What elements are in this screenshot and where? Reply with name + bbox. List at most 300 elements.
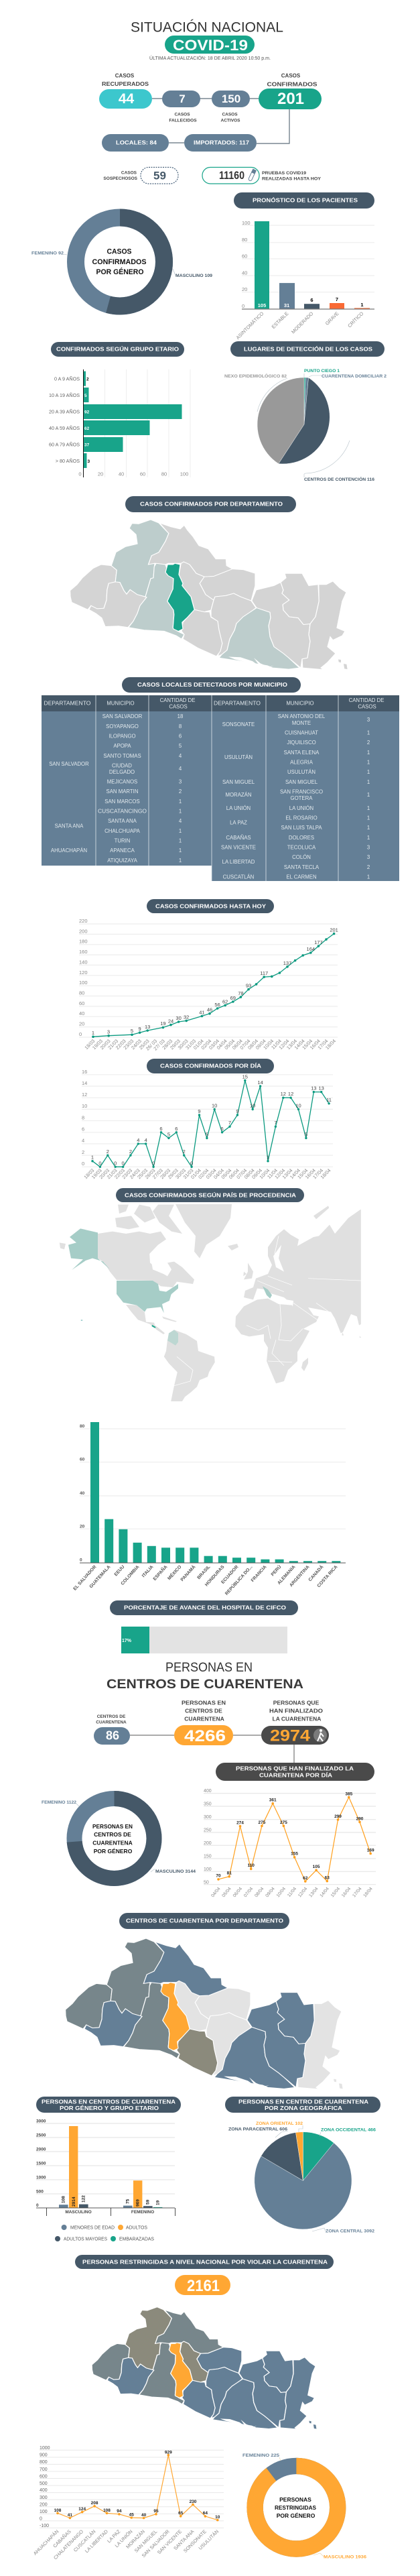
line chart: restricted by department: 500: [40, 2481, 48, 2486]
counter: active: CASOS: [222, 113, 238, 117]
line chart: confirmed per day: 03/04: [205, 1167, 218, 1180]
progress bar: hospital 17%: 17%: [122, 1639, 132, 1643]
bar chart: prognosis: 40: [242, 270, 247, 276]
gray land masses: [60, 1204, 361, 1401]
counter: people in centres: PERSONAS EN: [182, 1700, 226, 1706]
bar chart: age groups: 40 A 59 AÑOS: [49, 425, 80, 431]
bar chart: age groups: 37: [84, 443, 90, 448]
line chart: restricted by department: 108: [103, 2508, 111, 2513]
line chart: cumulative confirmed cases: 69: [230, 995, 236, 1001]
line chart: cumulative confirmed cases: 28/03: [161, 1038, 173, 1051]
line chart: finished quarantine per day: [204, 1789, 376, 1898]
table body: right half: GOTERA: [291, 795, 313, 801]
line chart: confirmed per day: 06/04: [228, 1167, 240, 1180]
bar chart: age groups: 80: [161, 471, 167, 477]
counter: local: LOCALES: 84: [116, 139, 157, 146]
title: ÚLTIMA ACTUALIZACIÓN: 18 DE ABRIL 2020 10:50 p.m.: [149, 55, 271, 61]
line chart: finished quarantine per day: 15/04: [330, 1887, 341, 1898]
line chart: finished quarantine per day: 361: [269, 1798, 277, 1802]
line chart: confirmed per day: 29/03: [167, 1167, 180, 1180]
pie chart: geographic zone: ZONA CENTRAL 3092: [326, 2229, 374, 2234]
line chart: finished quarantine per day: 11/04: [287, 1887, 297, 1898]
bar chart: gender and age group: FEMENINO: [131, 2210, 154, 2215]
line chart: cumulative confirmed cases: 29/03: [169, 1038, 182, 1051]
progress bar: hospital 17%: [121, 1627, 287, 1653]
heading: geographic zone: [225, 2097, 380, 2113]
table body: right half: LA UNIÓN: [226, 805, 251, 811]
bar chart: gender and age group: 500: [36, 2190, 44, 2194]
bar chart: age groups: 20 A 39 AÑOS: [49, 409, 80, 414]
bar chart: prognosis: 31: [284, 302, 289, 308]
counter: active: [212, 91, 250, 123]
line chart: finished quarantine per day: 18/04: [362, 1887, 374, 1898]
line chart: cumulative confirmed cases: 05/04: [223, 1038, 236, 1051]
table body: right half: 1: [367, 874, 370, 880]
heading: geographic zone: POR ZONA GEOGRÁFICA: [265, 2105, 342, 2111]
line chart: confirmed per day: 12: [281, 1091, 286, 1097]
bar chart: prognosis: 60: [242, 253, 247, 259]
line chart: cumulative confirmed cases: 56: [214, 1002, 220, 1008]
bar chart: cases by country: 60: [80, 1458, 85, 1462]
line chart: confirmed per day: 17/04: [311, 1167, 324, 1180]
pie chart: detection places: PUNTO CIEGO 1: [304, 369, 340, 373]
table body: right half: 1: [367, 750, 370, 756]
heading: municipalities: CASOS LOCALES DETECTADOS POR MUNICIPIO: [137, 681, 287, 688]
line chart: confirmed per day: 1: [267, 1155, 269, 1161]
bar chart: prognosis: [234, 220, 374, 341]
table body: left half: SAN SALVADOR: [49, 761, 89, 767]
table header: [44, 697, 384, 709]
map: confirmed cases by department: [70, 520, 348, 670]
line chart: cumulative confirmed cases: 27/ 03: [152, 1038, 166, 1052]
line chart: confirmed per day: 6: [159, 1126, 163, 1132]
line chart: cumulative confirmed cases: 40: [79, 1010, 84, 1016]
table body: left half: 1: [179, 828, 182, 834]
bar chart: prognosis: CRÍTICO: [346, 310, 365, 329]
bar chart: age groups: 60 A 79 AÑOS: [49, 441, 80, 448]
line chart: restricted by department: 124: [78, 2507, 86, 2512]
table body: left half: 5: [179, 743, 182, 749]
counter: tests: [202, 168, 322, 184]
bar chart: cases by country: COLOMBIA: [121, 1565, 141, 1586]
table body: left half: 1: [179, 809, 182, 814]
bar chart: gender and age group: 3000: [36, 2119, 46, 2124]
bar chart: gender and age group: 75: [126, 2199, 130, 2204]
bar chart: gender and age group: 122: [82, 2195, 86, 2203]
counter: people in centres: [174, 1700, 233, 1745]
heading: country of origin: [116, 1188, 304, 1202]
line chart: confirmed per day: 5: [305, 1131, 307, 1137]
line chart: confirmed per day: 5: [206, 1131, 208, 1137]
counter: active: ACTIVOS: [221, 118, 240, 123]
line chart: confirmed per day: 0: [98, 1160, 101, 1166]
bar chart: age groups: 40: [119, 471, 124, 477]
line chart: cumulative confirmed cases: 23/03: [122, 1038, 135, 1051]
line chart: cumulative confirmed cases: 18/04: [324, 1038, 337, 1051]
line chart: cumulative confirmed cases: 60: [79, 1000, 84, 1006]
line chart: cumulative confirmed cases: 117: [260, 970, 268, 976]
line chart: confirmed per day: 01/04: [190, 1167, 202, 1180]
donut: people in centres by gender: CUARENTENA: [92, 1840, 133, 1847]
table body: left half: 4: [179, 753, 182, 759]
counter: imported: IMPORTADOS: 117: [194, 139, 249, 146]
counter: people in centres: 4266: [184, 1727, 226, 1745]
line chart: finished quarantine per day: 299: [334, 1814, 342, 1819]
bar chart: cases by country: BRASIL: [196, 1565, 211, 1580]
bar chart: gender and age group: 969: [135, 2199, 141, 2207]
line chart: confirmed per day: 4: [137, 1137, 139, 1143]
line chart: restricted by department: 45: [129, 2513, 134, 2517]
line chart: cumulative confirmed cases: 177: [314, 939, 323, 945]
bar chart: age groups: 60: [140, 471, 145, 477]
line chart: finished quarantine per day: 200: [204, 1841, 212, 1846]
line chart: confirmed per day: 9: [198, 1108, 201, 1114]
line chart: confirmed per day: [82, 1069, 333, 1180]
line chart: cumulative confirmed cases: 30/03: [177, 1038, 190, 1051]
bar chart: gender and age group: 1500: [36, 2162, 46, 2166]
pie chart: detection places: CUARENTENA DOMICILIAR 2: [322, 374, 387, 379]
table body: left half: 6: [179, 734, 182, 739]
table body: left half: SOYAPANGO: [106, 723, 139, 729]
bar chart: cases by country: 80: [80, 1424, 85, 1429]
bar chart: cases by country: COSTA RICA: [316, 1565, 339, 1588]
donut: people in centres by gender: MASCULINO 3144: [155, 1869, 196, 1874]
pie chart: geographic zone: [228, 2121, 376, 2234]
table body: right half: COLÓN: [292, 854, 311, 860]
donut: restricted by gender: PERSONAS: [279, 2496, 311, 2503]
bar chart: prognosis: 80: [242, 237, 247, 243]
table body: right half: 1: [367, 779, 370, 785]
line chart: confirmed per day: 31/03: [182, 1167, 195, 1180]
line chart: confirmed per day: 4: [82, 1137, 84, 1144]
bar chart: cases by country: ESPAÑA: [151, 1564, 169, 1582]
table body: right half: JIQUILISCO: [287, 740, 316, 746]
line chart: confirmed per day: 28/03: [159, 1167, 171, 1180]
donut: restricted by gender: [242, 2453, 366, 2560]
donut: confirmed by gender: MASCULINO 109: [176, 274, 212, 278]
bar chart: age groups: 5: [84, 394, 87, 398]
heading: gender and age: POR GÉNERO Y GRUPO ETARIO: [60, 2105, 159, 2111]
line chart: confirmed per day: 19/03: [90, 1167, 103, 1180]
counter: deaths: FALLECIDOS: [169, 118, 197, 123]
table body: left half: CUSCATANCINGO: [98, 809, 147, 814]
line chart: confirmed per day: 10: [250, 1102, 255, 1108]
line chart: restricted by department: 0: [40, 2517, 42, 2521]
line chart: confirmed per day: 04/04: [212, 1167, 225, 1180]
line chart: confirmed per day: 18/03: [82, 1167, 95, 1180]
bar chart: prognosis: ESTABLE: [271, 310, 290, 330]
bar chart: gender and age group: 1000: [36, 2175, 46, 2180]
pie chart: detection places: NEXO EPIDEMIOLÓGICO 82: [224, 373, 287, 379]
donut: people in centres by gender: PERSONAS EN: [92, 1823, 133, 1830]
line chart: finished quarantine per day: 05/04: [221, 1887, 232, 1898]
title: [131, 20, 283, 61]
line chart: restricted by department: CUSCATLÁN: [72, 2528, 97, 2553]
line chart: confirmed per day: 6: [221, 1126, 224, 1132]
table body: left half: DELGADO: [109, 769, 135, 775]
heading: confirmed to date: [147, 899, 274, 913]
bar chart: gender and age group: 19: [155, 2200, 161, 2205]
heading: restricted people: [75, 2255, 334, 2269]
line chart: cumulative confirmed cases: 02/04: [200, 1038, 212, 1051]
panel: case counters: [99, 72, 322, 184]
bar chart: gender and age group: MASCULINO: [65, 2210, 92, 2215]
table body: right half: 1: [367, 815, 370, 821]
table header: CASOS: [358, 703, 376, 709]
table body: right half: SAN LUIS TALPA: [281, 825, 322, 831]
line chart: cumulative confirmed cases: 13: [145, 1024, 150, 1030]
donut: restricted by gender: POR GÉNERO: [277, 2512, 316, 2519]
line chart: cumulative confirmed cases: 24/03: [130, 1038, 143, 1051]
line chart: confirmed per day: 18/04: [319, 1167, 332, 1180]
panel: quarantine counters: [94, 1700, 329, 1763]
table body: left half: SANTA ANA: [108, 818, 137, 824]
bar chart: cases by country: ALEMANIA: [277, 1565, 297, 1586]
map: world, country of origin: [60, 1204, 361, 1401]
line chart: restricted by department: SONSONATE: [182, 2528, 208, 2554]
counter: recovered: [99, 72, 152, 109]
pie chart: geographic zone: ZONA OCCIDENTAL 466: [321, 2128, 376, 2132]
table body: right half: 1: [367, 825, 370, 831]
line chart: restricted by department: LA UNIÓN: [114, 2528, 134, 2549]
line chart: cumulative confirmed cases: 04/04: [216, 1038, 228, 1051]
line chart: cumulative confirmed cases: 19/03: [91, 1038, 104, 1051]
line chart: restricted by department: 230: [190, 2500, 197, 2504]
donut: restricted by gender: FEMENINO 225: [242, 2453, 279, 2458]
line chart: restricted by department: 300: [40, 2496, 48, 2500]
heading: confirmed per day: CASOS CONFIRMADOS POR DÍA: [160, 1062, 261, 1069]
line chart: confirmed per day: 21/03: [106, 1167, 119, 1180]
heading: hospital progress: PORCENTAJE DE AVANCE DEL HOSPITAL DE CIFCO: [124, 1604, 286, 1611]
line chart: cumulative confirmed cases: 26/ 03: [145, 1038, 158, 1052]
table body: right half: 1: [367, 759, 370, 766]
line chart: confirmed per day: 2: [183, 1149, 186, 1155]
line chart: restricted by department: USULUTÁN: [197, 2528, 220, 2551]
legend: EMBARAZADAS: [119, 2237, 154, 2242]
legend: MENORES DE EDAD: [70, 2226, 115, 2230]
table body: left half: CHALCHUAPA: [104, 828, 141, 834]
line chart: finished quarantine per day: 155: [291, 1852, 298, 1856]
heading: centres by department: CENTROS DE CUARENTENA POR DEPARTAMENTO: [126, 1918, 283, 1924]
line chart: confirmed per day: 22/03: [113, 1167, 126, 1180]
line chart: finished quarantine per day: 13/04: [308, 1887, 320, 1898]
counter: active: 150: [222, 93, 240, 105]
table body: left half: SAN SALVADOR: [102, 713, 143, 719]
counter: people finished: 2974: [270, 1727, 311, 1745]
heading: centres by department: [119, 1913, 289, 1929]
legend: ADULTOS MAYORES: [64, 2237, 107, 2242]
counter: people finished: PERSONAS QUE: [273, 1700, 320, 1706]
bar chart: age groups: [49, 369, 190, 477]
line chart: finished quarantine per day: 07/04: [243, 1887, 254, 1898]
line chart: cumulative confirmed cases: 10/04: [262, 1038, 275, 1051]
bar chart: cases by country: MÉXICO: [166, 1564, 182, 1581]
line chart: confirmed per day: 13: [311, 1086, 316, 1092]
line chart: restricted by department: 95: [153, 2509, 159, 2514]
table body: right half: 2: [367, 864, 370, 870]
line chart: cumulative confirmed cases: 09/04: [255, 1038, 267, 1051]
line chart: restricted by department: 65: [178, 2511, 184, 2516]
bar chart: prognosis: 100: [242, 220, 251, 226]
bar chart: age groups: 2: [86, 377, 89, 382]
table body: right half: [221, 713, 370, 880]
heading: country of origin: CASOS CONFIRMADOS SEGÚN PAÍS DE PROCEDENCIA: [125, 1191, 296, 1199]
line chart: restricted by department: LA LIBERTAD: [84, 2528, 109, 2554]
line chart: restricted by department: 94: [117, 2509, 122, 2514]
line chart: restricted by department: MORAZÁN: [125, 2528, 146, 2550]
table header: CASOS: [169, 703, 188, 709]
line chart: confirmed per day: 15/04: [296, 1167, 309, 1180]
counter: recovered: 44: [119, 91, 134, 107]
line chart: restricted by department: 400: [40, 2488, 48, 2493]
line chart: finished quarantine per day: 10/04: [276, 1887, 287, 1898]
table header: CANTIDAD DE: [160, 697, 195, 703]
line chart: cumulative confirmed cases: 19: [160, 1020, 166, 1027]
table body: right half: 1: [367, 835, 370, 841]
line chart: confirmed per day: 2: [107, 1149, 109, 1155]
line chart: finished quarantine per day: 275: [258, 1820, 266, 1825]
line chart: restricted by department: 929: [165, 2450, 172, 2455]
line chart: cumulative confirmed cases: 100: [79, 980, 88, 986]
bar chart: age groups: 100: [180, 471, 188, 477]
donut: confirmed by gender: [31, 217, 212, 306]
icon: test tube: [248, 169, 257, 182]
bar chart: cases by country: ARGENTINA: [289, 1565, 311, 1588]
line chart: finished quarantine per day: 06/04: [232, 1887, 243, 1898]
line chart: cumulative confirmed cases: 14/04: [293, 1038, 306, 1051]
heading: confirmed per day: [147, 1059, 274, 1073]
bar chart: prognosis: ASINTOMÁTICO: [234, 310, 265, 341]
title: quarantine centres: [107, 1661, 303, 1692]
line chart: cumulative confirmed cases: 32: [184, 1014, 189, 1020]
line chart: finished quarantine per day: 169: [367, 1848, 374, 1853]
donut: people in centres by gender: CENTROS DE: [94, 1831, 131, 1838]
heading: age group: CONFIRMADOS SEGÚN GRUPO ETARIO: [56, 345, 179, 353]
bar chart: gender and age group: 59: [146, 2199, 150, 2205]
bar chart: gender and age group: 2914: [72, 2197, 76, 2207]
line chart: cumulative confirmed cases: 06/04: [231, 1038, 244, 1051]
line chart: cumulative confirmed cases: 13/04: [285, 1038, 298, 1051]
bar chart: age groups: 10 A 19 AÑOS: [49, 392, 80, 398]
bar chart: age groups: > 80 AÑOS: [56, 458, 80, 464]
line chart: finished quarantine per day: 400: [204, 1789, 212, 1794]
line chart: cumulative confirmed cases: 137: [283, 960, 291, 966]
table body: right half: EL CARMEN: [286, 874, 317, 880]
line chart: cumulative confirmed cases: 80: [79, 990, 84, 996]
table body: left half: SAN MARTIN: [107, 788, 138, 795]
bar chart: gender and age group: 0: [36, 2203, 39, 2208]
counter: local: [102, 134, 169, 152]
line chart: restricted by department: CABAÑAS: [52, 2528, 72, 2549]
line chart: confirmed per day: 08/04: [243, 1167, 256, 1180]
table body: right half: 1: [367, 769, 370, 775]
line chart: confirmed per day: 23/03: [121, 1167, 133, 1180]
bar chart: cases by country: 20: [80, 1524, 85, 1529]
line chart: cumulative confirmed cases: 12/04: [277, 1038, 290, 1051]
line chart: cumulative confirmed cases: 30: [176, 1015, 182, 1021]
table body: right half: LA UNIÓN: [289, 805, 313, 811]
line chart: cumulative confirmed cases: 46: [207, 1007, 212, 1012]
table body: left half: AHUACHAPÁN: [51, 847, 87, 854]
table body: right half: MONTE: [292, 720, 311, 726]
counter: centres: CENTROS DE: [97, 1714, 126, 1719]
white borders and inland seas: [150, 1245, 284, 1274]
line chart: finished quarantine per day: 350: [204, 1802, 212, 1806]
bar chart: cases by country: PERÚ: [269, 1564, 283, 1577]
line chart: confirmed per day: 27/03: [151, 1167, 164, 1180]
map: quarantine centres by department: [66, 1938, 343, 2089]
donut: restricted by gender: MASCULINO 1936: [324, 2555, 366, 2560]
table body: right half: SAN FRANCISCO: [280, 788, 323, 795]
counter: recovered: RECUPERADOS: [102, 81, 149, 87]
line chart: confirmed per day: 12: [82, 1092, 87, 1098]
counter: restricted total: 2161: [187, 2277, 220, 2295]
table body: left half: 2: [179, 788, 182, 795]
bar chart: prognosis: 7: [336, 296, 338, 302]
line chart: cumulative confirmed cases: [79, 918, 338, 1052]
heading: hospital progress: [110, 1600, 298, 1615]
line chart: confirmed per day: 2: [82, 1149, 84, 1155]
table body: left half: ILOPANGO: [109, 734, 136, 739]
line chart: confirmed per day: 5: [167, 1131, 170, 1137]
bar chart: gender and age group: [36, 2119, 176, 2242]
line chart: restricted by department: 200: [40, 2502, 48, 2508]
line chart: confirmed per day: 10: [295, 1102, 301, 1108]
line chart: cumulative confirmed cases: 220: [79, 918, 88, 924]
line chart: confirmed per day: 16: [82, 1069, 87, 1075]
line chart: cumulative confirmed cases: 180: [79, 939, 88, 945]
line chart: confirmed per day: 25/03: [136, 1167, 149, 1180]
bar chart: cases by country: REPÚBLICA DO...: [224, 1564, 254, 1596]
table body: right half: 1: [367, 805, 370, 811]
table body: left half: 4: [179, 818, 182, 824]
line chart: confirmed per day: 6: [175, 1126, 178, 1132]
donut: people in centres by gender: [42, 1798, 196, 1879]
line chart: restricted by department: 600: [40, 2474, 48, 2479]
line chart: cumulative confirmed cases: 01/04: [192, 1038, 205, 1051]
table header: DEPARTAMENTO: [214, 700, 261, 707]
counter: tests: 11160: [219, 169, 244, 182]
table body: left half: TURIN: [115, 838, 130, 843]
line chart: confirmed per day: 4: [145, 1137, 147, 1143]
line chart: confirmed per day: 14: [257, 1079, 263, 1086]
counter: imported: [184, 134, 257, 152]
line chart: cumulative confirmed cases: 0: [79, 1031, 82, 1037]
heading: by department: [125, 496, 296, 512]
table body: right half: SAN MIGUEL: [285, 779, 318, 785]
table header: CANTIDAD DE: [349, 697, 384, 703]
line chart: finished quarantine per day: 16/04: [341, 1887, 352, 1898]
line chart: finished quarantine per day: 50: [204, 1880, 209, 1885]
line chart: cumulative confirmed cases: 93: [246, 983, 251, 988]
line chart: restricted by department: 208: [91, 2501, 98, 2506]
line chart: finished quarantine per day: 385: [345, 1792, 353, 1797]
line chart: cumulative confirmed cases: 20: [79, 1021, 84, 1027]
counter: people finished: [261, 1700, 329, 1745]
line chart: cumulative confirmed cases: 3: [107, 1029, 110, 1035]
heading: municipalities: [122, 677, 301, 693]
table body: left half: APANECA: [110, 847, 135, 854]
counter: tests: PRUEBAS COVID19: [262, 171, 306, 176]
bar chart: gender and age group: 2000: [36, 2147, 46, 2152]
bar chart: age groups: 3: [87, 459, 90, 464]
line chart: restricted by department: LA PAZ: [106, 2528, 122, 2544]
counter: centres: [94, 1714, 130, 1745]
bar chart: age groups: 20: [98, 471, 103, 477]
line chart: confirmed per day: 12: [288, 1091, 293, 1097]
table header: MUNICIPIO: [107, 700, 135, 707]
line chart: confirmed per day: 16/04: [304, 1167, 317, 1180]
